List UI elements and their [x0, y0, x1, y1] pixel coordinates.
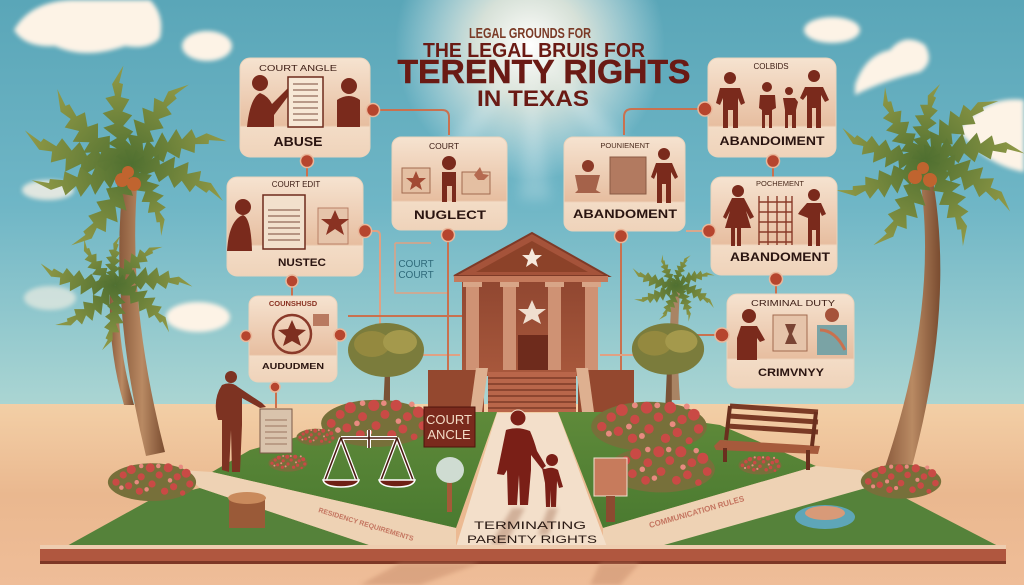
- sidewalk right: COMMUNICATION RULES: [648, 494, 746, 530]
- card: adjudgment: COUNSHUSD: [269, 299, 318, 308]
- lawn bottom right: [657, 487, 1000, 547]
- card: adjudgment: AUDUDMEN: [262, 362, 324, 371]
- courtside sign: ANCLE: [427, 427, 471, 442]
- card: adjudgment: [249, 296, 337, 382]
- sidewalk right: [603, 466, 880, 547]
- flower beds: [108, 400, 941, 501]
- mailbox stack: [594, 458, 627, 522]
- card: abandonment right: [711, 177, 837, 275]
- lawn left: [212, 412, 497, 528]
- connector dots: [240, 102, 782, 392]
- left garden tree: [348, 323, 424, 414]
- clouds: [14, 0, 1024, 332]
- card: abuse: COURT ANGLE: [259, 63, 337, 73]
- title: TERENTY RIGHTS: [398, 53, 690, 90]
- card: neglect: NUGLECT: [414, 208, 487, 222]
- path caption: [467, 520, 597, 546]
- parent and child shadow: [490, 508, 558, 545]
- card: court nustec: COURT EDIT: [272, 180, 320, 189]
- tree stump planter: [228, 492, 266, 528]
- card: abandonment right: ABANDOMENT: [730, 252, 830, 264]
- adult with document: [216, 371, 266, 472]
- title: LEGAL GROUNDS FOR: [469, 25, 591, 42]
- scales of justice: [323, 430, 415, 487]
- card: neglect: COURT: [429, 141, 459, 151]
- blue dish: [795, 505, 855, 529]
- card: criminal: [727, 294, 854, 388]
- card: abandonment right: POCHEMENT: [756, 179, 804, 188]
- courtside sign: COURT: [426, 412, 472, 427]
- base platform: [40, 545, 1006, 564]
- card: abuse: ABUSE: [274, 134, 323, 149]
- title: [398, 25, 690, 111]
- card: criminal: CRIMVNYY: [758, 367, 825, 379]
- left palm tree small: [36, 234, 192, 405]
- card: family abandonment: [708, 58, 836, 157]
- title: THE LEGAL BRUIS FOR: [423, 40, 646, 62]
- foreground shadows: [360, 563, 640, 585]
- path caption: PARENTY RIGHTS: [467, 534, 597, 546]
- right palm tree: [835, 81, 1024, 474]
- card: abandonment center: [564, 137, 685, 231]
- small court label: COURT: [398, 259, 434, 270]
- card: abandonment center: ABANDOMENT: [573, 209, 677, 221]
- connector lines: [276, 109, 776, 410]
- sidewalk left: [180, 470, 456, 547]
- courtside sign: [424, 407, 475, 447]
- path caption: TERMINATING: [474, 520, 586, 532]
- title: IN TEXAS: [477, 86, 589, 111]
- center palm tree: [629, 252, 720, 400]
- lawn right: [558, 412, 816, 528]
- card: court nustec: [227, 177, 363, 276]
- sidewalk left: RESIDENCY REQUIREMENTS: [317, 507, 415, 543]
- lawn bottom left: [65, 488, 375, 547]
- card: neglect: [392, 137, 507, 230]
- card: abuse: [240, 58, 370, 157]
- small court label: [398, 259, 434, 281]
- card: criminal: CRIMINAL DUTY: [751, 298, 835, 308]
- card: abandonment center: POUNIENENT: [600, 141, 650, 150]
- parent and child figure: [497, 410, 563, 507]
- small court label: COURT: [398, 270, 434, 281]
- courthouse: [428, 233, 634, 412]
- card: court nustec: NUSTEC: [278, 257, 326, 269]
- sand ground: [0, 404, 1024, 585]
- left palm tree large: [18, 66, 231, 456]
- card: family abandonment: COLBIDS: [753, 62, 789, 71]
- small lantern post: [436, 457, 464, 512]
- notice board: [260, 409, 292, 453]
- central walkway: [456, 413, 607, 547]
- right garden tree: [632, 323, 704, 410]
- card: family abandonment: ABANDOIMENT: [720, 136, 824, 148]
- sky background: [0, 0, 1024, 410]
- bench: [714, 406, 820, 470]
